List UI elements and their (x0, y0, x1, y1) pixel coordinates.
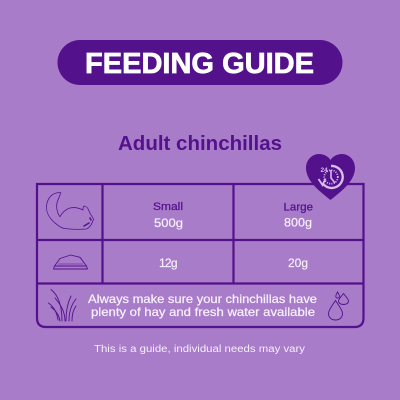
title pill: FEEDING GUIDE (85, 48, 314, 80)
note text (88, 292, 317, 319)
label: large: Large (284, 202, 313, 214)
icon: hay grass (48, 290, 76, 321)
title pill (58, 40, 342, 85)
heart badge (306, 154, 355, 200)
feeding table (37, 184, 364, 327)
value: 20g: 20g (288, 256, 308, 270)
icon: food bowl (54, 255, 88, 269)
icon: 24 hour clock: 24 (320, 167, 328, 174)
value: 500g: 500g (154, 216, 183, 230)
value: 12g: 12g (159, 256, 178, 270)
footer disclaimer: This is a guide, individual needs may vary (94, 344, 305, 355)
note text: Always make sure your chinchillas have (88, 292, 317, 306)
subtitle: Adult chinchillas (118, 133, 282, 155)
table grid (37, 184, 364, 327)
value: 800g: 800g (284, 216, 312, 230)
label: small: Small (153, 201, 183, 213)
note text: plenty of hay and fresh water available (91, 305, 315, 319)
icon: chinchilla (46, 193, 94, 229)
icon: water drops (328, 292, 348, 320)
